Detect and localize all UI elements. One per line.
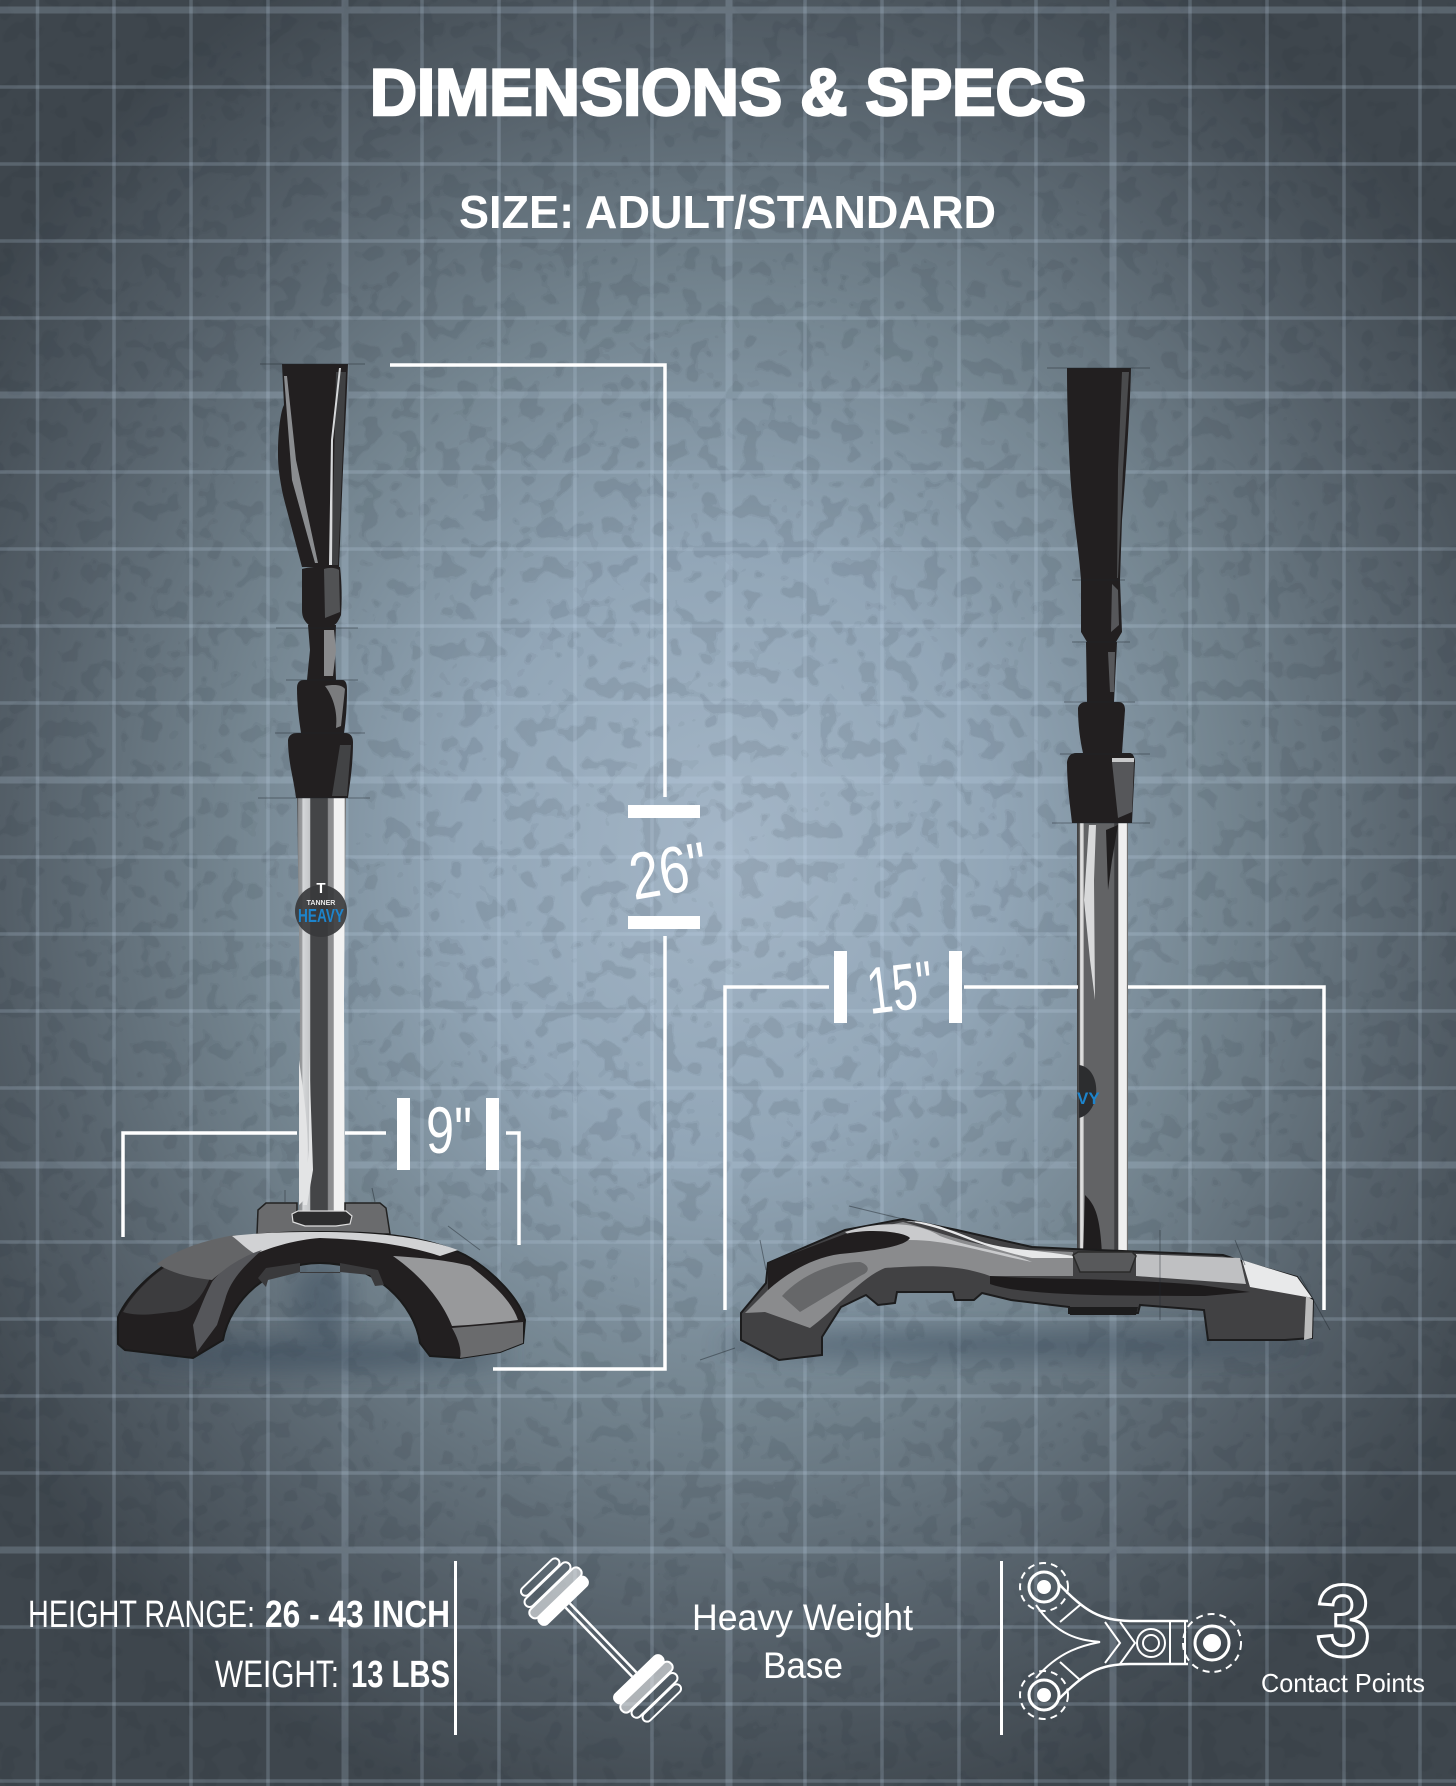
- icon: barbell: [513, 1550, 689, 1730]
- dimension: 9 inch base width: 9": [426, 1093, 472, 1167]
- base mount: [257, 1203, 390, 1234]
- spec: height range and weight: HEIGHT RANGE:: [28, 1594, 255, 1636]
- pole: [297, 796, 346, 1212]
- pole ring: [1073, 1252, 1136, 1272]
- right stand: side view: [700, 368, 1330, 1360]
- dimension: 26 inch height: [390, 365, 713, 1369]
- sketch construction lines: [700, 368, 1330, 1360]
- pole reflections: [299, 1050, 313, 1205]
- pole ring: [292, 1211, 352, 1226]
- contact points label with outlined 3: [1261, 1564, 1425, 1698]
- contact points label with outlined 3: 3: [1316, 1564, 1371, 1678]
- spec: height range and weight: [28, 1594, 450, 1696]
- grip highlights: [284, 368, 351, 796]
- under-arch shadow: [294, 1260, 350, 1340]
- logo badge: T: [316, 880, 326, 897]
- subtitle: size: SIZE: ADULT/STANDARD: [459, 186, 996, 238]
- dimension: 26 inch height: 26": [624, 827, 713, 914]
- logo badge: HEAVY: [298, 906, 344, 926]
- icon: three contact points base: [1020, 1563, 1241, 1719]
- spec: height range and weight: WEIGHT:: [215, 1654, 339, 1696]
- title: DIMENSIONS & SPECS: [370, 55, 1086, 129]
- grip and collars: [1067, 368, 1135, 823]
- logo badge: TANNER: [307, 900, 335, 907]
- dimension: 9 inch base width: [123, 1093, 519, 1245]
- divider left: [454, 1561, 457, 1735]
- grip highlights: [1117, 372, 1129, 578]
- sketch construction lines: [258, 364, 480, 1250]
- heavy weight base label: Base: [763, 1645, 843, 1686]
- divider right: [1000, 1561, 1003, 1735]
- logo badge: [295, 880, 347, 937]
- spec: height range and weight: 26 - 43 INCH: [265, 1594, 450, 1636]
- pole reflections: [1084, 825, 1096, 1000]
- base shadow: [130, 1341, 510, 1369]
- dimension: 15 inch base length: 15": [863, 946, 937, 1028]
- heavy weight base label: [692, 1597, 914, 1686]
- arch base: [118, 1232, 525, 1358]
- dimension: 15 inch base length: [725, 946, 1324, 1310]
- left stand: front view: [118, 364, 525, 1369]
- pole: [1077, 820, 1128, 1260]
- base shadow: [720, 1332, 1300, 1358]
- heavy weight base label: Heavy Weight: [692, 1597, 914, 1638]
- spec: height range and weight: 13 LBS: [351, 1654, 450, 1696]
- badge on side: VY: [1077, 1089, 1100, 1108]
- grip and collars: [278, 364, 353, 798]
- badge on side: [1077, 1065, 1100, 1118]
- base: [741, 1219, 1313, 1360]
- contact points label with outlined 3: Contact Points: [1261, 1668, 1425, 1698]
